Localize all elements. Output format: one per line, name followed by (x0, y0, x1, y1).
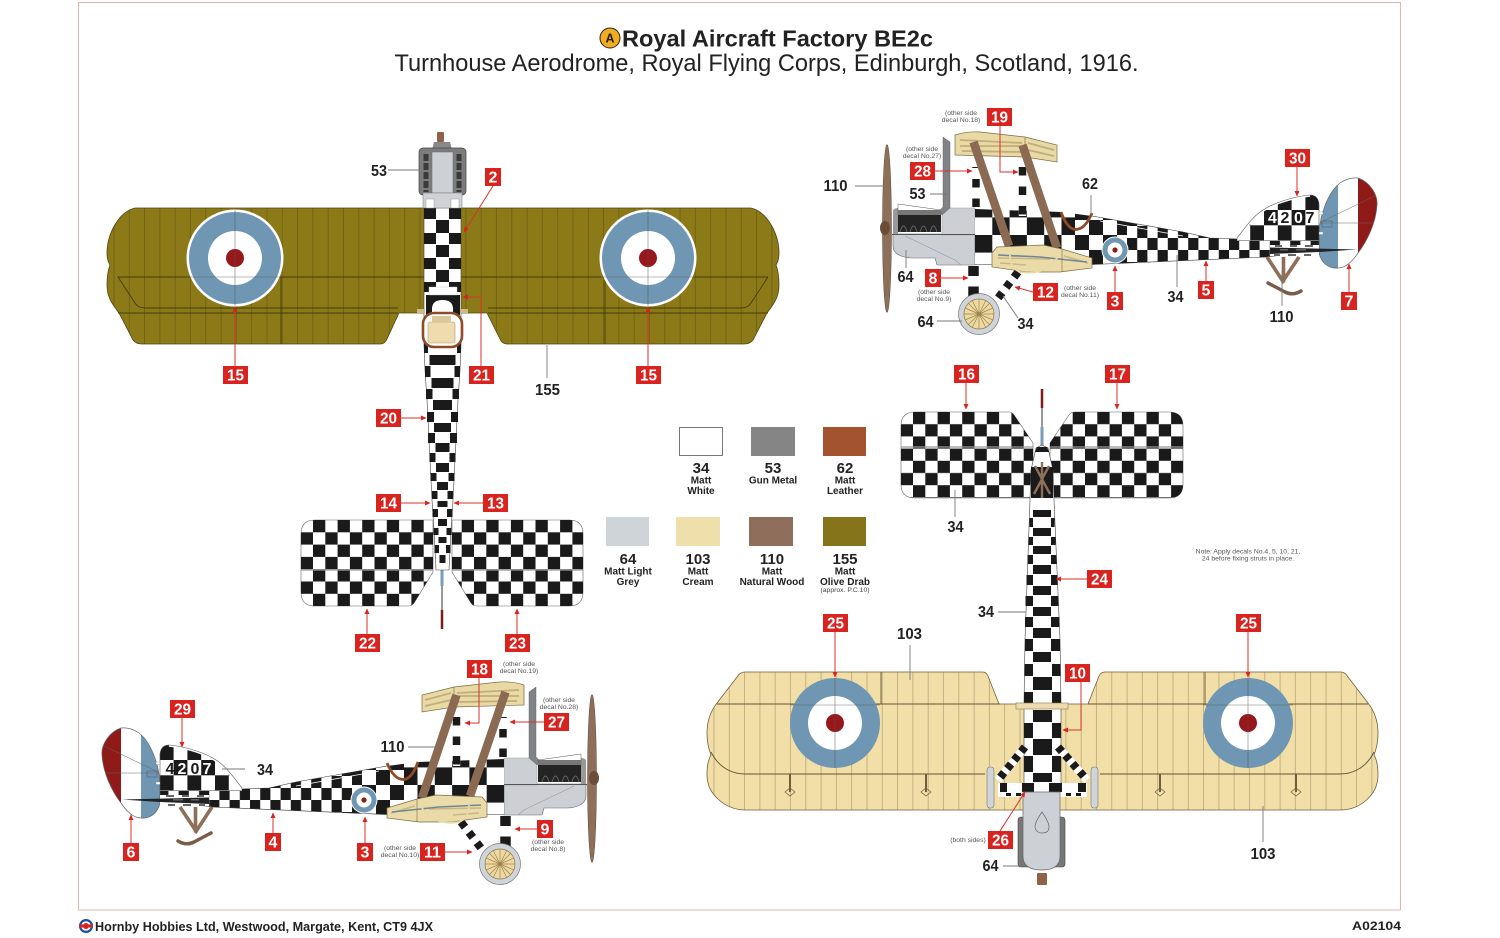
label 62 (1082, 176, 1098, 215)
swatch 34 (680, 428, 722, 497)
decal 27: 27 (548, 714, 565, 732)
decal 4: 4 (269, 834, 278, 852)
decal 12: 12 (1037, 284, 1054, 302)
swatch 62: Leather (827, 486, 863, 497)
decal 24: 24 (1091, 572, 1108, 588)
label 64 cowling: 64 (898, 269, 914, 286)
decal 11: decal No.10) (381, 852, 419, 859)
catalogue number: A02104 (1352, 919, 1401, 933)
top view engine (419, 132, 466, 208)
decal 8 (917, 269, 968, 303)
decal 15 right (636, 307, 661, 384)
decal 12: (other side (1064, 285, 1096, 292)
decal 19: (other side (945, 110, 977, 117)
label 155 (535, 345, 560, 399)
swatch 155 (820, 517, 870, 594)
label 110 left profile: 110 (380, 739, 405, 756)
decal 15 left (223, 307, 248, 384)
decal 3 left: 3 (361, 844, 370, 862)
decal 5: 5 (1202, 282, 1211, 300)
label 53 right profile: 53 (910, 186, 926, 203)
swatch 103: Cream (682, 577, 714, 588)
label 34 fuselage: 34 (1168, 289, 1184, 306)
decal 26 (950, 792, 1025, 850)
underside landing gear (987, 747, 1098, 808)
underside roundels (790, 678, 1293, 768)
serial 4207 left: 7 (203, 761, 212, 778)
decal 21 (463, 297, 494, 384)
label 34 left profile: 34 (257, 762, 273, 779)
decal 22: 22 (359, 636, 376, 652)
label 62: 62 (1082, 176, 1098, 193)
label 64 underside: 64 (982, 858, 999, 875)
scheme badge A: A (605, 32, 615, 46)
serial 4207 right (1268, 210, 1315, 227)
decal 16: 16 (958, 366, 975, 384)
underside fuselage (1016, 445, 1068, 792)
decal 7 (1341, 264, 1357, 310)
decal 30 (1285, 149, 1310, 196)
label 103 wing: 103 (897, 626, 922, 643)
serial 4207 right: 2 (1281, 210, 1290, 227)
decal 10: 10 (1069, 666, 1086, 682)
decal 15 right: 15 (640, 368, 657, 384)
decal 19 (942, 108, 1018, 172)
label 64 wheel: 64 (918, 314, 934, 331)
decal 8: 8 (929, 270, 938, 288)
label 110 right profile (824, 178, 885, 195)
icon: Airfix roundel (79, 919, 93, 933)
label 64 cowling (898, 250, 914, 286)
label 110 skid (1270, 270, 1294, 326)
decal 9: (other side (532, 839, 564, 846)
decal 29 (170, 700, 195, 747)
label 34 left profile (222, 762, 273, 779)
decal 18 (465, 660, 538, 723)
decal 18: (other side (503, 661, 535, 668)
aircraft: underside view (707, 389, 1378, 885)
decal 3 left (357, 817, 373, 862)
decal 27: (other side (543, 697, 575, 704)
swatch 62 (823, 427, 866, 497)
decal 5 (1198, 261, 1214, 300)
swatch 155: Matt (835, 567, 856, 578)
decal 25 right (1236, 614, 1261, 677)
label 34 underside tail (948, 490, 964, 536)
swatch 64: 64 (620, 551, 637, 568)
swatch 155: 155 (832, 551, 858, 568)
swatch 62: Matt (835, 476, 856, 486)
note: Note: Apply decals No.4, 5, 10, 21, (1196, 548, 1300, 556)
label 110 skid: 110 (1270, 309, 1294, 326)
decal 28: (other side (906, 146, 938, 153)
label 155: 155 (535, 382, 560, 399)
main title: Royal Aircraft Factory BE2c (622, 26, 933, 52)
scheme badge A (600, 28, 620, 48)
serial 4207 right: 4 (1268, 210, 1277, 227)
decal 21: 21 (473, 368, 490, 384)
swatch 103: Matt (688, 567, 709, 578)
swatch 64: Grey (617, 577, 640, 588)
underside rudder (1041, 389, 1043, 446)
decal 16 (954, 365, 979, 409)
decal 13: 13 (487, 496, 504, 512)
label 110 right profile: 110 (824, 178, 848, 195)
decal 11: (other side (384, 845, 416, 852)
decal callouts (123, 108, 1357, 862)
label 34 underside fuselage (978, 604, 1026, 621)
swatch 110: 110 (760, 551, 784, 568)
aircraft: top view (107, 132, 779, 629)
decal 8: decal No.9) (917, 296, 951, 303)
decal 23: 23 (509, 636, 526, 652)
label 103 lower wing (1250, 806, 1276, 863)
decal 20 (376, 409, 426, 428)
label 103 wing (897, 626, 922, 680)
top view fuselage (424, 208, 461, 570)
decal 24 (1056, 570, 1112, 588)
decal 2 (464, 168, 501, 232)
label 34 gear (1003, 296, 1034, 333)
decal 19: decal No.18) (942, 117, 980, 124)
decal 12: decal No.11) (1061, 292, 1099, 299)
serial 4207 right: 7 (1306, 210, 1315, 227)
decal 29: 29 (174, 702, 191, 718)
serial 4207 left: 4 (166, 761, 175, 778)
label 103 lower wing: 103 (1250, 846, 1276, 863)
decal 27: decal No.28) (540, 704, 578, 711)
colour legend (604, 427, 870, 594)
label 53 top view: 53 (371, 163, 387, 180)
decal 6 (123, 815, 139, 862)
label 64 wheel (918, 314, 962, 331)
decal 26: (both sides) (950, 837, 986, 844)
decal 12 (1015, 283, 1099, 302)
decal 10 (1063, 664, 1090, 730)
decal 17: 17 (1109, 366, 1126, 384)
decal 2: 2 (489, 170, 498, 186)
footer address: Hornby Hobbies Ltd, Westwood, Margate, Kent, CT9 4JX (95, 920, 434, 934)
underside engine cowling (1018, 792, 1065, 885)
decal 4 (265, 813, 281, 852)
decal 14: 14 (380, 496, 397, 512)
swatch 34: 34 (693, 460, 710, 477)
swatch 110: Matt (762, 567, 783, 578)
footer (79, 919, 1401, 934)
top view tailplane (301, 520, 583, 606)
label 53 top view (371, 163, 420, 180)
decal 14 (376, 494, 430, 512)
decal 18: 18 (471, 662, 488, 678)
decal 26: 26 (992, 832, 1009, 850)
swatch 34: White (687, 486, 715, 497)
top view cockpit (417, 309, 468, 347)
label 34 underside tail: 34 (948, 519, 964, 536)
decal 25 right: 25 (1240, 616, 1257, 632)
decal 8: (other side (918, 289, 950, 296)
top view wings (107, 208, 779, 344)
decal 28: decal No.27) (903, 153, 941, 160)
decal 22 (355, 609, 380, 652)
serial 4207 left (166, 761, 212, 778)
decal 25 left: 25 (827, 616, 844, 632)
swatch 34: Matt (691, 476, 712, 486)
decal 20: 20 (380, 410, 397, 428)
label 34 fuselage (1168, 255, 1184, 306)
top view roundels (186, 210, 696, 306)
decal 3 right (1107, 266, 1123, 310)
label 64 underside (982, 858, 1025, 875)
decal 7: 7 (1345, 294, 1354, 310)
decal 11: 11 (424, 844, 441, 862)
aircraft: right profile (880, 132, 1380, 334)
decal 9: decal No.8) (531, 846, 565, 853)
decal 15 left: 15 (227, 368, 244, 384)
swatch 64: Matt Light (604, 567, 653, 578)
label 34 underside fuselage: 34 (978, 604, 994, 621)
decal 3 right: 3 (1111, 294, 1120, 310)
title block (394, 26, 1138, 77)
decal 9: 9 (541, 822, 550, 838)
swatch 103: 103 (685, 551, 711, 568)
decal 25 left (823, 614, 848, 677)
subtitle: Turnhouse Aerodrome, Royal Flying Corps, Edinburgh, Scotland, 1916. (394, 50, 1138, 77)
decal 28: 28 (914, 164, 931, 180)
decal 13 (454, 494, 508, 512)
decal 19: 19 (991, 110, 1008, 126)
decal 11 (381, 843, 472, 862)
swatch 53: 53 (765, 460, 781, 477)
paint labels (222, 163, 1294, 875)
top view rudder (440, 570, 444, 629)
decal 23 (505, 609, 530, 652)
swatch 110: Natural Wood (740, 577, 804, 588)
serial 4207 right: 0 (1294, 210, 1303, 227)
decal 27 (510, 697, 578, 732)
swatch 155: Olive Drab (820, 577, 870, 588)
decal 6: 6 (127, 844, 136, 862)
swatch 155: (approx. P.C.10) (820, 587, 870, 594)
label 110 left profile (380, 739, 438, 756)
decal 18: decal No.19) (500, 668, 538, 675)
swatch 103 (676, 517, 720, 588)
decal 28 (903, 146, 972, 180)
aircraft: left profile (99, 682, 599, 884)
note (1196, 548, 1300, 562)
swatch 110 (740, 517, 804, 588)
underside tailplane (901, 412, 1183, 498)
decal 30: 30 (1289, 150, 1306, 168)
note: 24 before fixing struts in place. (1202, 556, 1294, 562)
serial 4207 left: 0 (191, 761, 200, 778)
swatch 53: Gun Metal (749, 476, 797, 486)
swatch 62: 62 (837, 460, 853, 477)
decal 17 (1105, 365, 1130, 409)
decal 9 (515, 820, 565, 853)
serial 4207 left: 2 (178, 761, 187, 778)
label 53 right profile (910, 186, 948, 203)
underside wings (707, 672, 1378, 810)
swatch 53 (749, 427, 797, 486)
swatch 64 (604, 517, 653, 588)
label 34 gear: 34 (1018, 316, 1034, 333)
